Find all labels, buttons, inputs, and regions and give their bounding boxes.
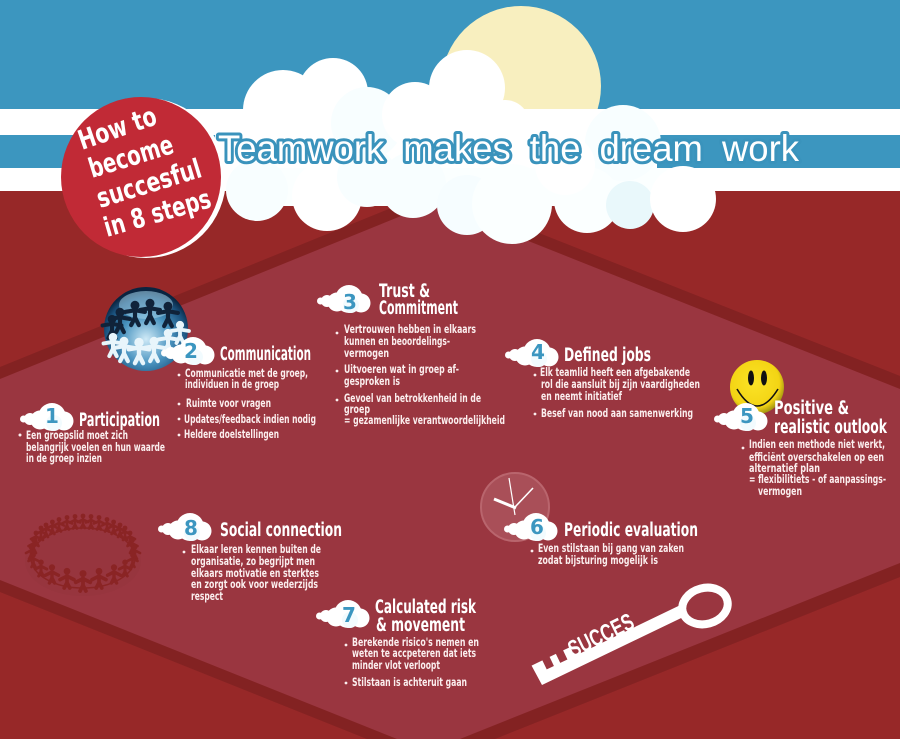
step 4 text: rol die aansluit bij zijn vaardigheden: [541, 377, 700, 391]
background: white and blue stripes: [0, 109, 900, 191]
step 7 text: Stilstaan is achteruit gaan: [352, 675, 467, 689]
step 2 cloud number: 2: [184, 339, 198, 363]
icon: smiley: [730, 360, 784, 414]
step 3 cloud number: 3: [343, 290, 357, 314]
step 4 heading: Defined jobs: [564, 345, 651, 366]
step 8 text: Elkaar leren kennen buiten de: [191, 542, 321, 556]
badge: how to become succesful in 8 steps: in 8 steps: [100, 184, 215, 244]
step 4 text: en neemt initiatief: [541, 389, 623, 403]
step 3 heading: [379, 281, 458, 319]
step 1 cloud number: [20, 403, 74, 431]
step 2 text: Updates/feedback indien nodig: [184, 412, 316, 426]
step 3: trust and commitment: [317, 281, 505, 427]
step 7 text: Berekende risico's nemen en: [352, 635, 479, 649]
step 8 text: organisatie, zo begrijpt men: [191, 554, 315, 568]
step 3 text: kunnen en beoordelings-: [344, 334, 450, 348]
icon: key labelled succes: SUCCES: [564, 608, 639, 663]
step 4: defined jobs: [505, 339, 700, 420]
step 7 text: weten te accpeteren dat iets: [352, 646, 476, 660]
step 3 heading: Commitment: [379, 298, 458, 319]
step 2 text: Communicatie met de groep,: [185, 366, 308, 380]
step 5 heading: Positive &: [774, 398, 849, 419]
step 7 text: [345, 635, 479, 689]
step 6 cloud number: 6: [530, 515, 544, 539]
step 7 text: minder vlot verloopt: [352, 658, 440, 672]
icon: globe with paper people: [103, 287, 189, 371]
step 3 text: [336, 322, 505, 427]
step 7 cloud number: 7: [342, 603, 356, 627]
step 7 heading: & movement: [376, 615, 465, 636]
step 6 text: [531, 541, 684, 567]
step 1 text: belangrijk voelen en hun waarde: [26, 440, 165, 454]
step 7: calculated risk and movement: [316, 597, 479, 689]
step 5 text: vermogen: [758, 484, 802, 498]
step 3 text: = gezamenlijke verantwoordelijkheid: [344, 413, 505, 427]
badge: how to become succesful in 8 steps: become: [85, 130, 177, 185]
step 6 heading: Periodic evaluation: [564, 520, 698, 541]
step 6 text: zodat bijsturing mogelijk is: [538, 553, 658, 567]
step 5 text: [742, 437, 886, 498]
step 2 text: individuen in de groep: [185, 377, 279, 391]
step 5 text: alternatief plan: [749, 461, 820, 475]
step 8 text: respect: [191, 589, 223, 603]
badge: how to become succesful in 8 steps: [61, 97, 226, 258]
background: sky: [0, 0, 900, 109]
icon: key labelled succes: [532, 583, 732, 685]
step 3 heading: Trust &: [379, 281, 430, 302]
step 8 text: [183, 542, 321, 603]
step 1 text: in de groep inzien: [26, 451, 102, 465]
step 3 text: gesproken is: [344, 374, 400, 388]
badge: how to become succesful in 8 steps: How to: [74, 101, 161, 157]
step 5 cloud number: [714, 403, 768, 431]
step 2 text: Heldere doelstellingen: [184, 427, 279, 441]
step 6 cloud number: [504, 513, 558, 541]
step 1 text: Een groepslid moet zich: [26, 428, 128, 442]
step 2 text: Ruimte voor vragen: [186, 396, 271, 410]
background: diamond panel: [0, 191, 900, 739]
step 4 text: [534, 365, 700, 420]
badge: how to become succesful in 8 steps: succesful: [93, 153, 205, 215]
step 7 heading: Calculated risk: [375, 597, 476, 618]
step 3 text: Uitvoeren wat in groep af-: [344, 362, 459, 376]
step 8 text: en zorgt ook voor wederzijds: [191, 577, 318, 591]
step 3 text: groep: [344, 402, 370, 416]
main cloud: [215, 50, 716, 244]
step 2 text: [178, 366, 316, 441]
step 5: positive and realistic outlook: [714, 398, 887, 498]
step 4 cloud number: [505, 339, 558, 367]
step 1 cloud number: 1: [45, 404, 59, 428]
step 8 cloud number: 8: [184, 516, 198, 540]
step 8 heading: Social connection: [220, 520, 342, 541]
step 3 text: Gevoel van betrokkenheid in de: [344, 391, 481, 405]
step 6 text: Even stilstaan bij gang van zaken: [538, 541, 684, 555]
step 1 text: [18, 428, 165, 465]
title: Teamwork makes the dream work: [218, 128, 799, 169]
background: red ground: [0, 191, 900, 739]
step 2 heading: Communication: [220, 344, 311, 365]
step 6: periodic evaluation: [504, 513, 698, 567]
sun: [441, 6, 601, 166]
icon: ring of people: [25, 514, 141, 596]
step 5 cloud number: 5: [740, 404, 754, 428]
step 1 heading: Participation: [79, 410, 160, 431]
step 8: social connection: [158, 513, 342, 603]
step 3 text: Vertrouwen hebben in elkaars: [344, 322, 476, 336]
step 4 text: Elk teamlid heeft een afgebakende: [540, 365, 690, 379]
step 3 cloud number: [317, 285, 370, 314]
step 7 cloud number: [316, 600, 370, 628]
icon: clock: [481, 473, 549, 541]
step 2: communication: [161, 337, 316, 441]
step 5 heading: [774, 398, 887, 438]
step 3 text: vermogen: [344, 346, 389, 360]
step 8 cloud number: [158, 513, 212, 541]
step 4 cloud number: 4: [531, 340, 545, 364]
step 7 heading: [375, 597, 476, 636]
step 4 text: Besef van nood aan samenwerking: [541, 406, 693, 420]
step 8 text: elkaars motivatie en sterktes: [191, 566, 319, 580]
step 1: participation: [18, 403, 165, 465]
step 2 cloud number: [161, 337, 214, 365]
